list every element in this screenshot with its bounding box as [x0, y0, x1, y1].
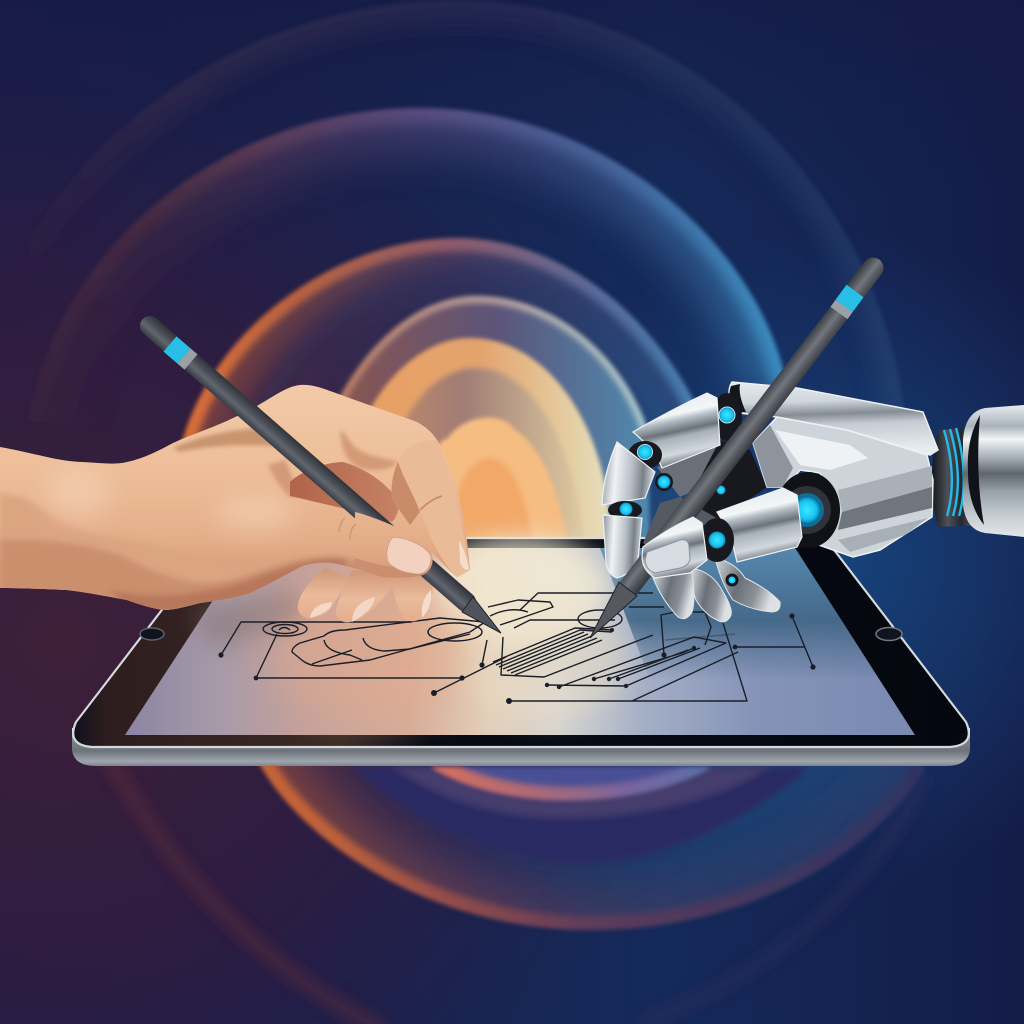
robot finger middle segment	[602, 442, 655, 505]
tablet	[72, 535, 970, 766]
robot palm interior	[643, 440, 767, 555]
forearm inner dark rim	[968, 415, 984, 525]
lower left faint ring	[100, 740, 385, 1024]
back of hand top shadow	[173, 428, 275, 452]
screen warm left glow	[270, 580, 470, 720]
robot finger top segment	[633, 393, 720, 468]
hollow between fingers and thumb	[290, 462, 399, 522]
robot back plate	[729, 382, 938, 455]
technical drawing on the screen	[218, 593, 816, 704]
tablet bezel	[73, 538, 969, 747]
central warm glow	[338, 338, 612, 545]
thumb middle joint	[700, 518, 734, 562]
core inner blob	[452, 458, 534, 545]
robot wrist connector	[932, 428, 985, 527]
lower band between dark ring and pink ring	[392, 767, 770, 818]
palm dark stripes	[838, 487, 932, 530]
robot arm	[932, 405, 1024, 537]
thumb tip	[642, 517, 707, 578]
purple and blue ring	[39, 106, 785, 392]
robot pen	[590, 268, 873, 638]
index finger crease	[420, 496, 442, 510]
pen tip	[462, 597, 501, 633]
robot thumb	[642, 472, 840, 578]
index finger nail	[459, 540, 469, 570]
palm highlight	[775, 430, 868, 470]
subtle inner top arc	[240, 272, 700, 470]
tablet metal lip	[72, 728, 970, 766]
lower pink ring	[431, 767, 712, 800]
orange ring	[176, 238, 925, 930]
tablet camera left	[140, 628, 164, 640]
robot palm shell	[753, 417, 933, 557]
robot finger middle joint	[628, 441, 662, 469]
robot lower fingers	[653, 558, 780, 622]
robot joint lights	[620, 407, 735, 516]
outermost faint ring	[76, 0, 902, 407]
human hand	[0, 380, 480, 620]
robot top joint	[712, 393, 742, 441]
wrist cyan rings	[944, 428, 964, 516]
tablet screen	[125, 535, 915, 735]
thumb knuckle creases	[339, 518, 356, 540]
pen tip	[590, 582, 637, 638]
robot forearm cylinder	[963, 405, 1024, 537]
human pen	[150, 326, 501, 633]
palm fold	[268, 460, 300, 497]
tan inner ring	[338, 296, 650, 540]
index finger shadow	[391, 462, 420, 525]
lower dark blue band	[353, 767, 810, 863]
wrist highlight	[44, 466, 112, 518]
screen cream reflection	[430, 535, 610, 645]
curled fingers below the pen	[298, 568, 433, 622]
core outer band	[338, 338, 612, 545]
index finger side	[424, 518, 470, 577]
forearm lower shading	[0, 494, 236, 610]
palm upper dark stripe	[838, 466, 932, 512]
upper finger shadow	[340, 430, 398, 470]
knuckle highlight	[215, 494, 295, 530]
robot finger lower segment	[603, 515, 642, 578]
tablet camera right	[876, 628, 902, 640]
forearm under shadow	[0, 538, 379, 610]
core mauve band	[382, 368, 584, 545]
palm and forearm	[0, 380, 480, 615]
robot finger lower joint	[608, 501, 642, 519]
core light blob	[420, 418, 568, 545]
forearm bottom edge shadow	[110, 559, 345, 612]
screen lower reflection arc	[460, 600, 630, 720]
palm mid stripe	[838, 518, 928, 552]
hand shadow on the screen	[190, 590, 300, 650]
pen cyan band	[839, 291, 855, 313]
thumb first segment	[717, 488, 802, 562]
thumb base joint	[776, 472, 840, 548]
palm left shade	[753, 425, 793, 487]
thumb lower shade	[355, 558, 428, 578]
lower right faint ring	[640, 775, 925, 1024]
human thumb	[339, 512, 433, 578]
pen cyan band	[170, 344, 191, 362]
thumb nail	[387, 537, 431, 574]
